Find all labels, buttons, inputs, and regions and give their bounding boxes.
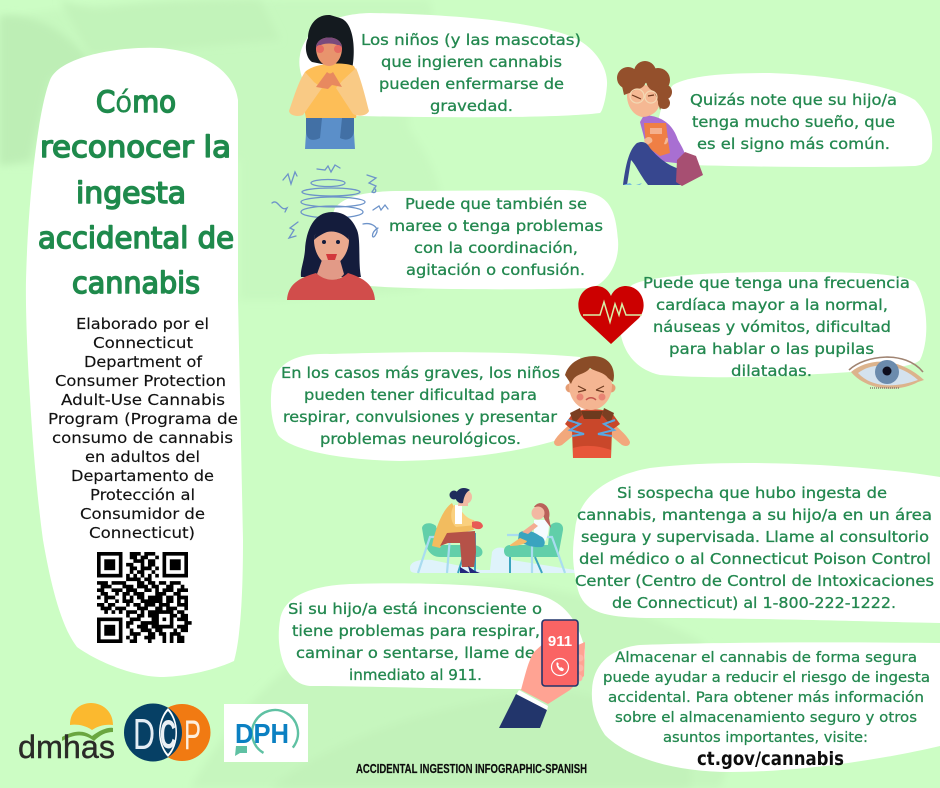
text: problemas neurológicos. <box>320 430 521 448</box>
text: Si sospecha que hubo ingesta de <box>617 484 887 502</box>
text: tenga mucho sueño, que <box>692 113 895 131</box>
icon: dizzy woman <box>272 165 388 300</box>
credits text: Program (Programa de <box>48 410 238 428</box>
QR code <box>97 554 192 641</box>
text: Puede que también se <box>405 195 587 213</box>
text <box>281 364 560 448</box>
text: respirar, convulsiones y presentar <box>283 408 558 426</box>
text: pueden tener dificultad para <box>304 386 537 404</box>
text: de Connecticut) al 1-800-222-1222. <box>612 594 896 612</box>
text: sobre el almacenamiento seguro y otros <box>615 710 917 726</box>
bubble <box>592 642 940 772</box>
text <box>690 91 897 153</box>
text: asuntos importantes, visite: <box>663 730 868 746</box>
text: pueden enfermarse de <box>379 75 564 93</box>
text: segura y supervisada. Llame al consultorio <box>581 528 929 546</box>
panel: suspected ingestion <box>573 463 940 623</box>
panel: sleepiness <box>617 61 932 186</box>
credits text: Elaborado por el <box>76 315 209 333</box>
text: cannabis, mantenga a su hijo/a en un área <box>577 506 932 524</box>
text: dilatadas. <box>731 362 812 380</box>
title: Cómo <box>96 85 176 119</box>
panel: children and pets <box>289 13 607 149</box>
text: tiene problemas para respirar, <box>292 622 540 640</box>
text <box>361 31 581 115</box>
text: con la coordinación, <box>414 239 578 257</box>
text: Si su hijo/a está inconsciente o <box>288 600 542 618</box>
logo: DCP <box>124 704 210 762</box>
text <box>288 600 542 684</box>
text: gravedad. <box>430 97 513 115</box>
bubble <box>620 272 926 377</box>
title: accidental de <box>38 221 234 255</box>
text: Center (Centro de Control de Intoxicaciones <box>575 572 934 590</box>
logo: DCP: P <box>184 711 201 758</box>
credits text: Connecticut) <box>89 524 195 542</box>
icon: heart with pulse <box>578 286 644 344</box>
credits text: Connecticut <box>93 334 193 352</box>
text <box>603 650 930 746</box>
credits text: Consumidor de <box>80 505 205 523</box>
icon: hand holding phone: 911 <box>548 633 572 650</box>
logo: DPH: DPH <box>235 718 289 749</box>
logo: DPH <box>224 702 308 764</box>
icon: child with breathing difficulty <box>554 356 630 458</box>
title: cannabis <box>72 266 200 300</box>
icon: worried woman <box>289 15 369 149</box>
panel: dizziness <box>272 165 618 300</box>
illustration: adult and child seated in chairs <box>410 488 575 573</box>
bubble <box>279 583 585 689</box>
text: del médico o al Connecticut Poison Control <box>579 550 931 568</box>
website link: ct.gov/cannabis <box>697 748 844 770</box>
text: Puede que tenga una frecuencia <box>643 274 910 292</box>
credits text: Departamento de <box>71 467 214 485</box>
title: reconocer la <box>40 130 231 164</box>
icon: sleepy child <box>617 61 703 186</box>
panel: call 911 <box>279 583 585 728</box>
text: que ingieren cannabis <box>381 53 562 71</box>
text <box>643 274 910 380</box>
text <box>575 484 934 612</box>
logo: DCP: D <box>133 710 155 759</box>
title <box>38 85 234 300</box>
panel: title and credits <box>26 48 243 677</box>
bubble <box>655 73 932 167</box>
text: Quizás note que su hijo/a <box>690 91 897 109</box>
text: inmediato al 911. <box>349 666 482 684</box>
text: Almacenar el cannabis de forma segura <box>615 650 917 666</box>
text: para hablar o las pupilas <box>669 340 874 358</box>
icon: hand holding phone <box>499 620 585 728</box>
logo: dmhas: dmhas <box>18 729 115 765</box>
icon: eye <box>849 357 924 389</box>
panel: severe cases <box>271 352 630 461</box>
bubble <box>573 463 940 623</box>
footer note: ACCIDENTAL INGESTION INFOGRAPHIC-SPANISH <box>356 761 587 776</box>
bubble <box>271 352 600 461</box>
credits text: Consumer Protection <box>55 372 226 390</box>
credits text: en adultos del <box>85 448 200 466</box>
text <box>389 195 603 279</box>
panel: safe storage <box>592 642 940 772</box>
bubble <box>299 13 607 117</box>
credits text: Adult-Use Cannabis <box>61 391 225 409</box>
credits text: Protección al <box>90 486 195 504</box>
logo: dmhas <box>18 703 115 765</box>
text: accidental. Para obtener más información <box>608 690 924 706</box>
title: ingesta <box>76 176 186 210</box>
text: náuseas y vómitos, dificultad <box>653 318 891 336</box>
text: puede ayudar a reducir el riesgo de ingesta <box>603 670 930 686</box>
text: es el signo más común. <box>697 135 890 153</box>
panel: heart rate and pupils <box>578 272 926 389</box>
text: Los niños (y las mascotas) <box>361 31 581 49</box>
text: En los casos más graves, los niños <box>281 364 560 382</box>
credits text: consumo de cannabis <box>52 429 233 447</box>
text: agitación o confusión. <box>406 261 585 279</box>
credits text: Department of <box>84 353 203 371</box>
text: cardíaca mayor a la normal, <box>656 296 888 314</box>
text: caminar o sentarse, llame de <box>296 644 535 662</box>
bubble <box>332 190 618 289</box>
credits text <box>48 315 238 542</box>
logo: DCP: C <box>160 713 176 757</box>
panel background <box>26 48 243 677</box>
text: maree o tenga problemas <box>389 217 603 235</box>
